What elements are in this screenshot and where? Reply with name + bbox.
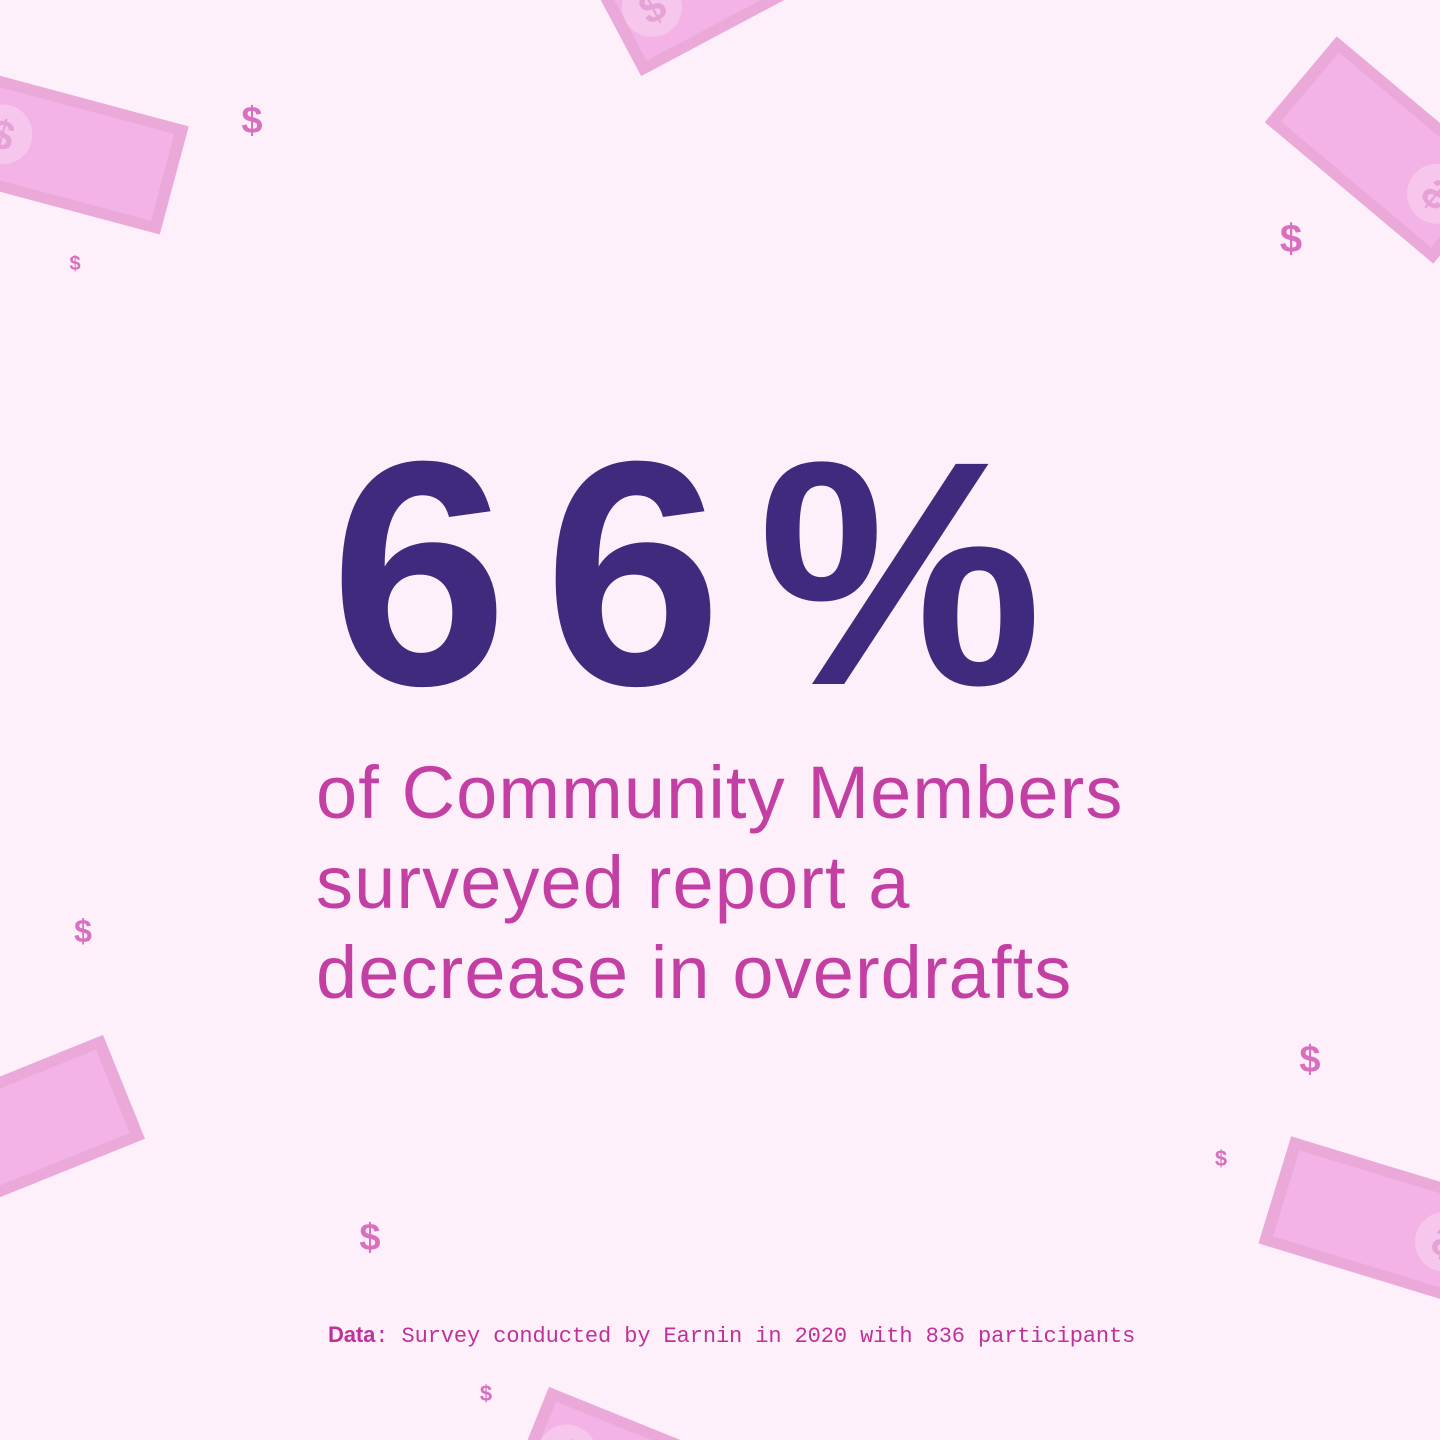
dollar signs: $ — [480, 1381, 492, 1406]
dollar signs: $ — [1215, 1146, 1227, 1171]
bill: bottom left — [0, 1035, 145, 1221]
dollar signs — [69, 100, 1321, 1406]
dollar signs: $ — [74, 913, 92, 949]
footer source note: Data: Survey conducted by Earnin in 2020 with 836 participants — [328, 1322, 1135, 1349]
bill: top left — [0, 69, 189, 235]
subtitle text — [316, 751, 1123, 1014]
dollar signs: $ — [69, 253, 81, 275]
dollar signs: $ — [359, 1217, 381, 1259]
bill: bottom center — [507, 1387, 753, 1440]
subtitle text: surveyed report a — [316, 841, 911, 924]
headline number: 66% — [330, 394, 1078, 752]
dollar signs: $ — [1280, 217, 1302, 261]
bill: top right — [1265, 36, 1440, 264]
bill: top center — [589, 0, 835, 76]
subtitle text: decrease in overdrafts — [316, 931, 1072, 1014]
subtitle text: of Community Members — [316, 751, 1123, 834]
dollar signs: $ — [1299, 1039, 1321, 1081]
dollar signs: $ — [241, 100, 263, 142]
bill: bottom right — [1258, 1136, 1440, 1308]
